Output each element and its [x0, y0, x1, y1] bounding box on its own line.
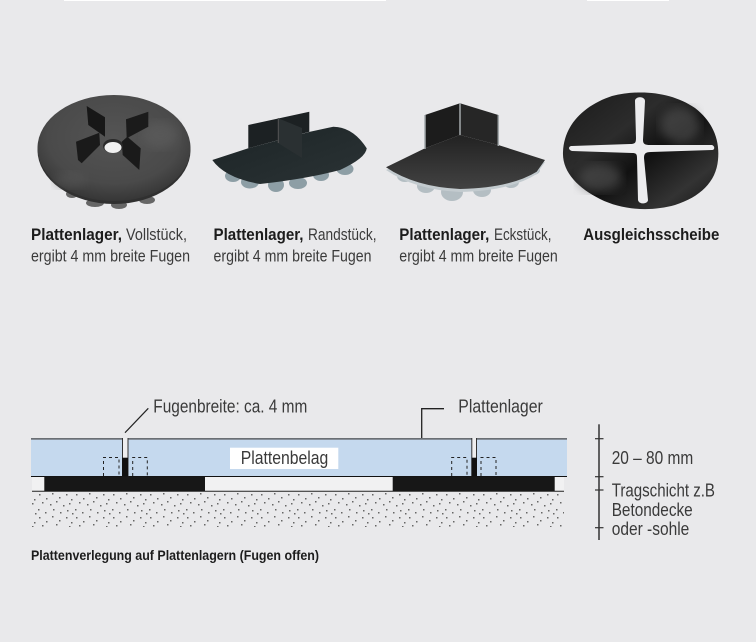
caption: Randstück: Plattenlager, — [214, 225, 304, 244]
hidden pad fins (dashed) — [104, 458, 496, 476]
dimension scale — [595, 424, 604, 540]
caption: Vollstück: Plattenlager, — [31, 225, 122, 244]
dimension label: bearing layer: Betondecke — [612, 500, 693, 520]
caption: Vollstück: Vollstück, — [126, 225, 187, 244]
caption: Randstück: Randstück, — [308, 225, 376, 244]
label: Plattenbelag: Plattenbelag — [241, 448, 328, 468]
diagram caption: Plattenverlegung auf Plattenlagern (Fugen offen) — [31, 547, 319, 563]
label: support pad leader and text — [422, 397, 543, 476]
dimension label: bearing layer — [612, 481, 715, 539]
caption: Randstück: ergibt 4 mm breite Fugen — [214, 246, 372, 266]
product: Plattenlager Randstück — [212, 112, 376, 266]
caption: Randstück — [214, 225, 376, 266]
product: Plattenlager Eckstück — [386, 103, 558, 266]
product: Ausgleichsscheibe — [563, 92, 719, 244]
caption: Vollstück — [31, 225, 190, 266]
icon: levelling disc with cross slot — [563, 92, 718, 209]
ground: concrete bearing layer — [32, 477, 564, 527]
open joint left — [122, 438, 128, 477]
caption: Eckstück: Eckstück, — [494, 225, 552, 244]
open joint right — [471, 438, 477, 477]
icon: half-round edge support pad — [212, 112, 367, 192]
label: joint width leader and text: Fugenbreite: ca. 4 mm — [153, 397, 307, 417]
caption: Eckstück — [399, 225, 558, 266]
caption: Ausgleichsscheibe: Ausgleichsscheibe — [583, 225, 719, 244]
label: joint width leader and text — [125, 397, 307, 433]
section diagram: paving on support pads — [31, 397, 715, 540]
icon: round full support pad — [38, 95, 190, 209]
product: Plattenlager Vollstück — [31, 95, 190, 266]
caption: Eckstück: Plattenlager, — [399, 225, 489, 244]
dimension label: bearing layer: Tragschicht z.B — [612, 481, 715, 501]
support pad left — [44, 476, 205, 491]
label: support pad leader and text: Plattenlager — [458, 397, 543, 417]
support pad right — [393, 476, 555, 491]
dimension label: bearing layer: oder -sohle — [612, 519, 689, 539]
dimension label: thickness: 20 – 80 mm — [612, 448, 693, 468]
caption: Eckstück: ergibt 4 mm breite Fugen — [399, 246, 558, 266]
icon: corner support pad — [386, 103, 545, 201]
caption: Vollstück: ergibt 4 mm breite Fugen — [31, 246, 190, 266]
paving slabs — [31, 438, 567, 477]
